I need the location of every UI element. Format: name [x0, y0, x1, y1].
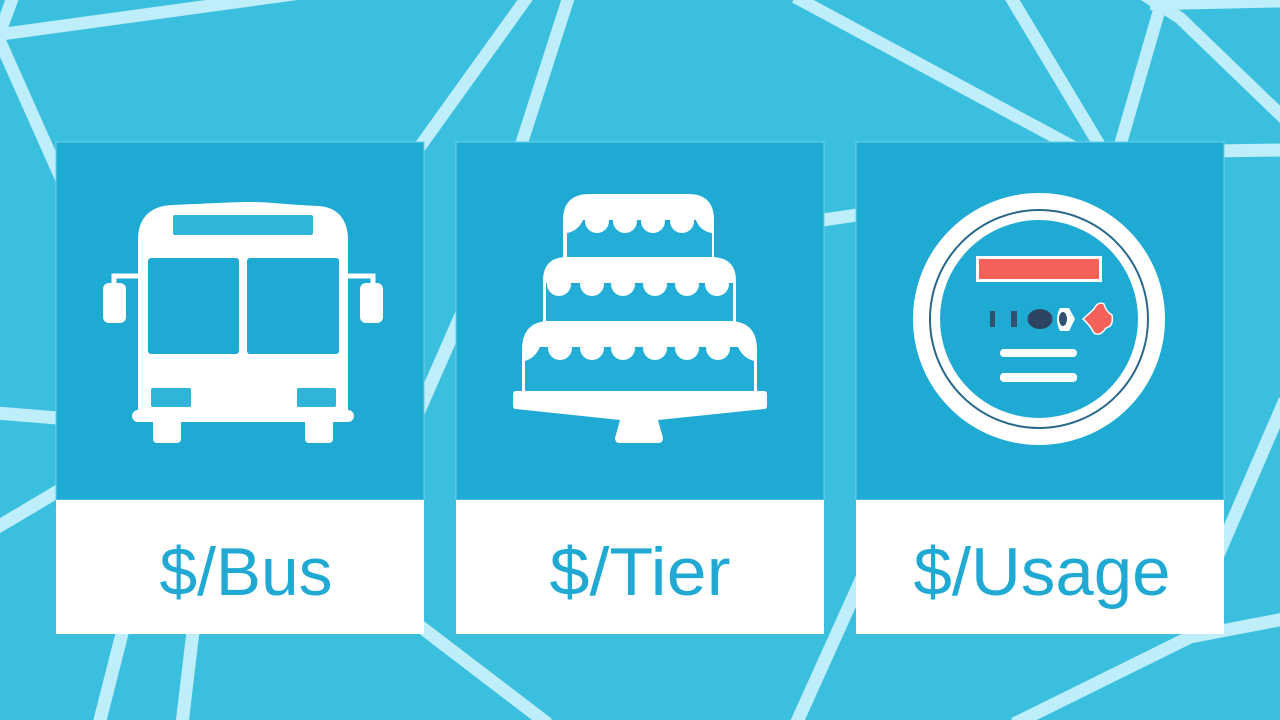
panel: tier pricing: [456, 142, 824, 634]
label: $/Tier: $/Tier: [550, 534, 730, 610]
icon: tiered cake: [513, 194, 767, 443]
icon: utility meter: [926, 206, 1152, 432]
icon: bus: [103, 202, 383, 443]
panel: bus pricing: [56, 142, 424, 634]
panel: usage pricing: [856, 142, 1224, 634]
label: $/Bus: $/Bus: [160, 534, 332, 610]
label: $/Usage: $/Usage: [914, 534, 1170, 610]
